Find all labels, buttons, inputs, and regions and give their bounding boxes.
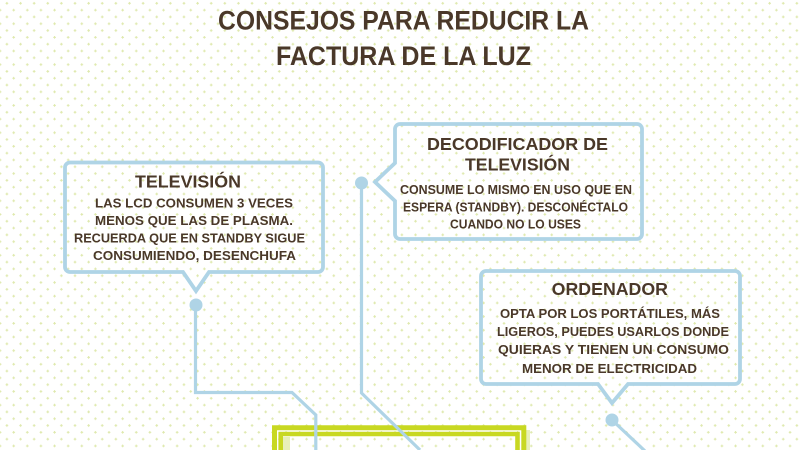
text: televisión tip: LAS LCD CONSUMEN 3 VECES (95, 197, 293, 211)
callout box: ordenador (481, 271, 740, 403)
heading: decodificador de televisión: DECODIFICADOR DE (427, 134, 608, 154)
panel: televisión (65, 162, 323, 291)
panel: decodificador de televisión (375, 124, 642, 239)
connector: televisión (190, 298, 316, 450)
text: ordenador tip (497, 306, 729, 376)
text: ordenador tip: MENOR DE ELECTRICIDAD (522, 362, 697, 376)
text: televisión tip: CONSUMIENDO, DESENCHUFA (93, 249, 296, 263)
title (218, 6, 589, 71)
heading: ordenador: ORDENADOR (552, 279, 668, 299)
panel: ordenador (481, 271, 740, 403)
text: televisión tip: RECUERDA QUE EN STANDBY SIGUE (74, 232, 305, 246)
callout box: televisión (65, 162, 323, 291)
connector: ordenador (606, 414, 645, 450)
text: televisión tip: MENOS QUE LAS DE PLASMA. (95, 214, 293, 228)
text: ordenador tip: LIGEROS, PUEDES USARLOS DONDE (497, 325, 729, 339)
heading: decodificador de televisión: TELEVISIÓN (465, 154, 570, 175)
text: decodificador tip: CUANDO NO LO USES (450, 218, 581, 232)
text: decodificador tip: ESPERA (STANDBY). DESCONÉCTALO (403, 200, 628, 215)
text: decodificador tip (400, 183, 632, 232)
green frame: appliance screen (274, 428, 530, 450)
callout box: decodificador (375, 124, 642, 239)
text: ordenador tip: OPTA POR LOS PORTÁTILES, MÁS (500, 306, 720, 321)
heading: televisión: TELEVISIÓN (135, 171, 241, 192)
connector: decodificador (355, 176, 420, 450)
heading: decodificador de televisión (427, 134, 608, 175)
title: FACTURA DE LA LUZ (276, 41, 531, 71)
title: CONSEJOS PARA REDUCIR LA (218, 6, 589, 36)
text: televisión tip (74, 197, 305, 263)
text: decodificador tip: CONSUME LO MISMO EN USO QUE EN (400, 183, 632, 197)
text: ordenador tip: QUIERAS Y TIENEN UN CONSUMO (498, 343, 729, 357)
